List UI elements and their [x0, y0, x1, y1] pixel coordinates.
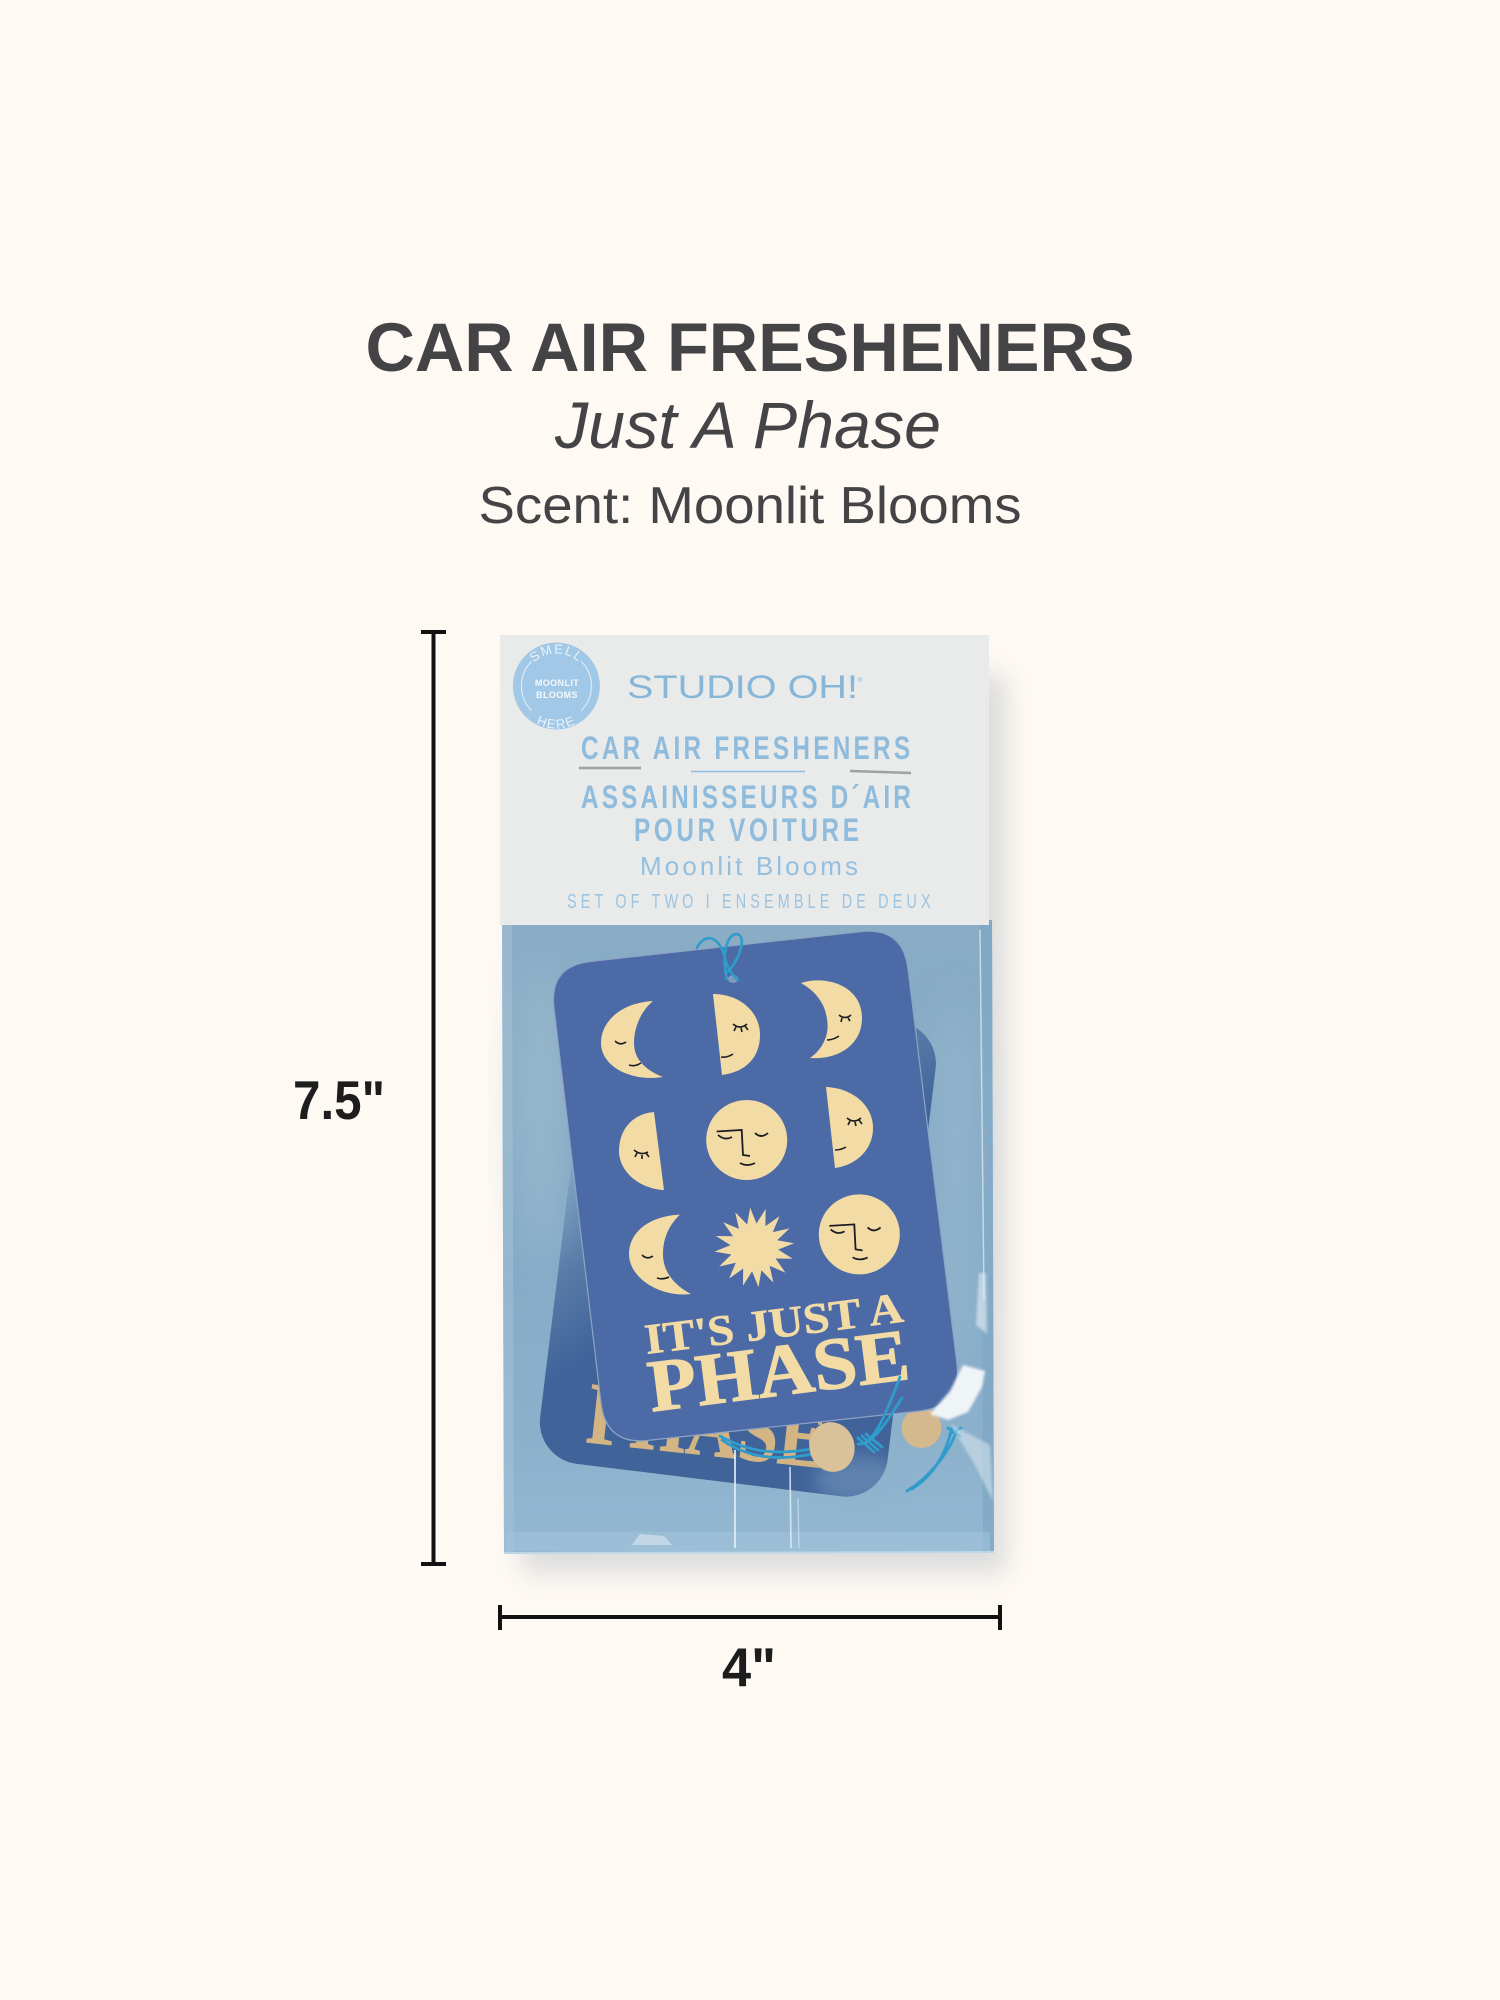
- moon: half left: [619, 1112, 664, 1190]
- product package: [500, 635, 1015, 1582]
- front air freshener card: [553, 931, 958, 1441]
- card scent name: Moonlit Blooms: [640, 851, 858, 881]
- sticker: smell here: SMELL: [530, 644, 580, 662]
- card heading french line 1: ASSAINISSEURS D´AIR: [581, 780, 911, 816]
- plastic bag: [502, 920, 994, 1553]
- card background: [500, 635, 989, 925]
- brand logo text: STUDIO OH!: [627, 669, 858, 705]
- moon: crescent right: [801, 980, 862, 1058]
- sticker: smell here: [512, 642, 600, 730]
- staple left: [579, 767, 641, 769]
- width label: 4": [722, 1636, 776, 1698]
- card set count: SET OF TWO I ENSEMBLE DE DEUX: [567, 890, 931, 913]
- header card: [500, 635, 989, 925]
- back card PHASE text: PHASE: [583, 1365, 832, 1488]
- title: CAR AIR FRESHENERS: [366, 309, 1134, 386]
- moon: half right: [713, 994, 760, 1075]
- sticker: smell here: HERE: [537, 716, 575, 729]
- sticker: smell here: BLOOMS: [536, 690, 578, 700]
- moon: half right lower: [826, 1087, 873, 1168]
- card slogan line 2: PHASE: [644, 1314, 914, 1428]
- card slogan line 1: IT'S JUST A: [642, 1285, 906, 1364]
- hang hole: [728, 975, 738, 983]
- wooden bead front: [804, 1417, 860, 1477]
- strings behind front card: [720, 1428, 961, 1491]
- back card haze: [815, 1456, 905, 1504]
- moon: waning crescent: [601, 1001, 663, 1078]
- moon: full face lower right: [819, 1194, 900, 1274]
- card body: [553, 931, 958, 1441]
- back air freshener card: [535, 984, 941, 1501]
- card heading english: CAR AIR FRESHENERS: [581, 731, 910, 767]
- card heading french line 2: POUR VOITURE: [634, 813, 859, 849]
- icon: sun: [710, 1203, 798, 1291]
- rule: [691, 770, 805, 772]
- wooden bead back: [902, 1408, 942, 1448]
- height dimension bracket: [421, 631, 446, 1564]
- bottom string and knot: [858, 1377, 902, 1452]
- top string loop: [697, 934, 742, 980]
- subtitle: product name: Just A Phase: [554, 388, 941, 462]
- staple right: [850, 771, 911, 773]
- scent line: Scent: Moonlit Blooms: [478, 477, 1022, 535]
- plastic glare: [632, 1273, 993, 1548]
- package shadow: [522, 675, 1006, 1573]
- height label: 7.5": [293, 1069, 385, 1131]
- width dimension bracket: [500, 1605, 1000, 1630]
- moon: crescent lower left: [629, 1215, 691, 1295]
- moon: full face: [706, 1100, 787, 1180]
- sticker: smell here: MOONLIT: [535, 678, 579, 688]
- registered mark: ®: [858, 677, 863, 684]
